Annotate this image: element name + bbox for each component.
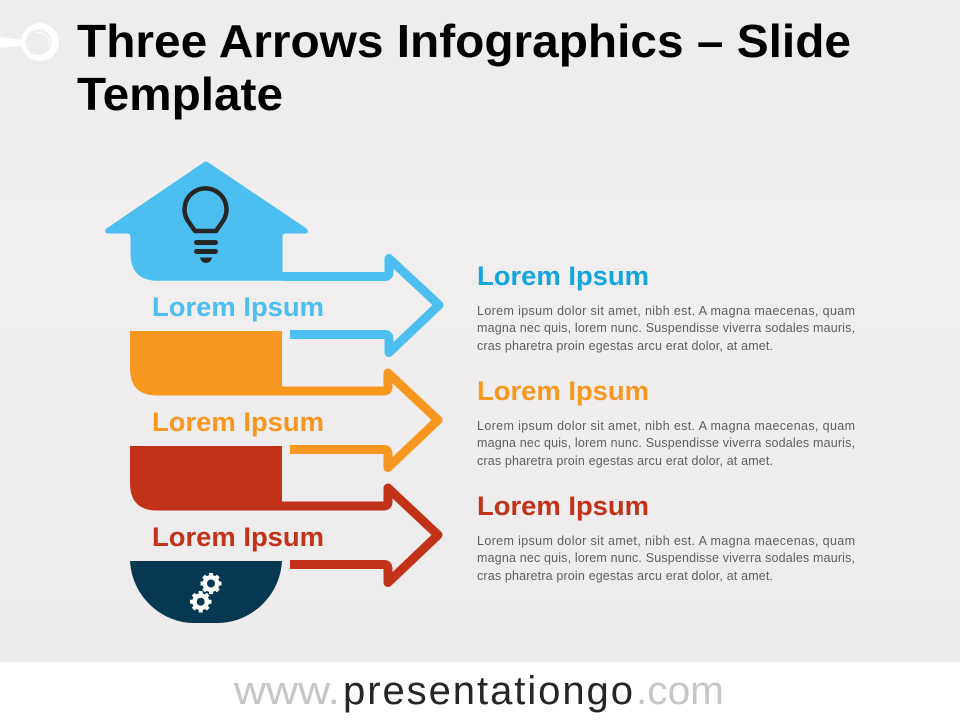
text block 1: Lorem ipsum dolor sit amet, nibh est. A magna maecenas, quam (477, 304, 855, 318)
text block 2: cras pharetra proin egestas arcu erat dolor, at amet. (477, 454, 773, 468)
footer website: .com (636, 669, 724, 713)
text block 2: Lorem Ipsum (477, 376, 649, 406)
title: Three Arrows Infographics – Slide (77, 15, 851, 67)
icon: light bulb (184, 188, 227, 263)
footer website: www. (233, 669, 340, 713)
text block 1: Lorem Ipsum (477, 261, 649, 291)
navy base with gears (130, 561, 282, 623)
text block 3: magna nec quis, lorem nunc. Suspendisse viverra sodales mauris, (477, 551, 855, 565)
title (77, 15, 851, 120)
title: Template (77, 68, 283, 120)
text block 3: Lorem Ipsum (477, 491, 649, 521)
text block 3 (477, 491, 855, 583)
footer website: presentationgo (343, 669, 633, 713)
text block 2: magna nec quis, lorem nunc. Suspendisse viverra sodales mauris, (477, 436, 855, 450)
icon: gears (190, 573, 222, 612)
text block 3: cras pharetra proin egestas arcu erat dolor, at amet. (477, 569, 773, 583)
footer website (233, 669, 724, 713)
text block 1: magna nec quis, lorem nunc. Suspendisse viverra sodales mauris, (477, 321, 855, 335)
label: Lorem Ipsum red: Lorem Ipsum (152, 522, 324, 552)
arrow 1: blue house with arrow (105, 162, 439, 352)
label: Lorem Ipsum orange: Lorem Ipsum (152, 407, 324, 437)
text block 1: cras pharetra proin egestas arcu erat dolor, at amet. (477, 339, 773, 353)
text block 1 (477, 261, 855, 353)
text block 2 (477, 376, 855, 468)
label: Lorem Ipsum blue: Lorem Ipsum (152, 292, 324, 322)
arrow 2: orange block with arrow (130, 331, 438, 468)
text block 3: Lorem ipsum dolor sit amet, nibh est. A magna maecenas, quam (477, 534, 855, 548)
arrow 3: red block with arrow (130, 446, 438, 582)
text block 2: Lorem ipsum dolor sit amet, nibh est. A magna maecenas, quam (477, 419, 855, 433)
icon: title ring marker (0, 23, 59, 61)
